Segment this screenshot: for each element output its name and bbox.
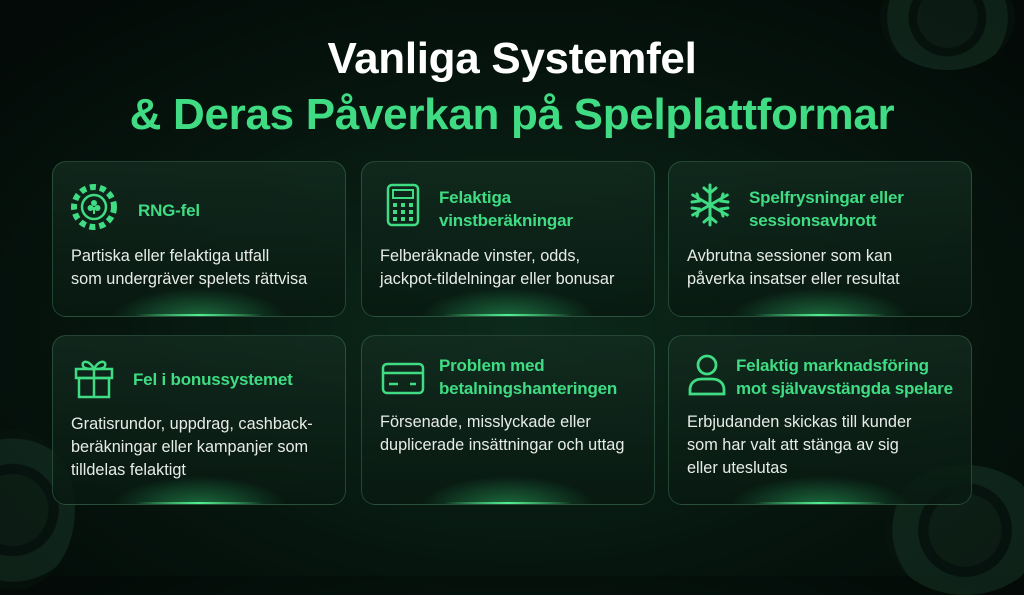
title	[130, 34, 894, 139]
heading	[749, 188, 904, 230]
panel: marknadsföring	[668, 335, 972, 505]
heading: Spelfrysningar eller	[749, 188, 904, 207]
text: eller uteslutas	[687, 459, 787, 477]
decorative chip bottom right	[885, 465, 1024, 595]
heading: vinstberäkningar	[439, 211, 573, 230]
text	[380, 413, 624, 454]
text: Partiska eller felaktiga utfall	[71, 247, 269, 265]
icon: chip with club	[71, 184, 117, 230]
panel: RNG-fel	[52, 161, 346, 317]
icon: person	[688, 354, 726, 396]
heading: betalningshanteringen	[439, 379, 617, 398]
heading: mot självavstängda spelare	[736, 379, 953, 398]
panel: vinstberäkningar	[361, 161, 655, 317]
title: Vanliga Systemfel	[327, 34, 697, 83]
decorative chip top right	[880, 0, 1015, 70]
heading: RNG-fel	[138, 201, 200, 220]
text: Felberäknade vinster, odds,	[380, 247, 580, 265]
panel: spelfrysningar	[668, 161, 972, 317]
decorative chip bottom left	[0, 430, 75, 590]
text	[687, 413, 912, 477]
text: duplicerade insättningar och uttag	[380, 436, 624, 454]
text: som undergräver spelets rättvisa	[71, 270, 307, 288]
text: tilldelas felaktigt	[71, 461, 186, 479]
text: Försenade, misslyckade eller	[380, 413, 591, 431]
heading	[439, 188, 573, 230]
icon: card	[382, 362, 424, 394]
text: som har valt att stänga av sig	[687, 436, 899, 454]
heading: Fel i bonussystemet	[133, 370, 293, 389]
text: Avbrutna sessioner som kan	[687, 247, 892, 265]
heading: Problem med	[439, 356, 544, 375]
text	[687, 247, 900, 288]
text: beräkningar eller kampanjer som	[71, 438, 308, 456]
text: påverka insatser eller resultat	[687, 270, 900, 288]
icon: snowflake	[690, 184, 730, 226]
text	[71, 415, 313, 479]
text: Gratisrundor, uppdrag, cashback-	[71, 415, 313, 433]
text	[380, 247, 614, 288]
heading: sessionsavbrott	[749, 211, 876, 230]
heading	[439, 356, 617, 398]
heading: Felaktiga	[439, 188, 511, 207]
panel: bonussystemet	[52, 335, 346, 505]
icon: calculator	[386, 184, 420, 226]
title: & Deras Påverkan på Spelplattformar	[130, 90, 894, 139]
heading: Felaktig marknadsföring	[736, 356, 929, 375]
icon: gift	[74, 360, 114, 398]
panel: betalning	[361, 335, 655, 505]
text	[71, 247, 308, 288]
text: Erbjudanden skickas till kunder	[687, 413, 911, 431]
text: jackpot-tildelningar eller bonusar	[380, 270, 614, 288]
heading	[736, 356, 953, 398]
